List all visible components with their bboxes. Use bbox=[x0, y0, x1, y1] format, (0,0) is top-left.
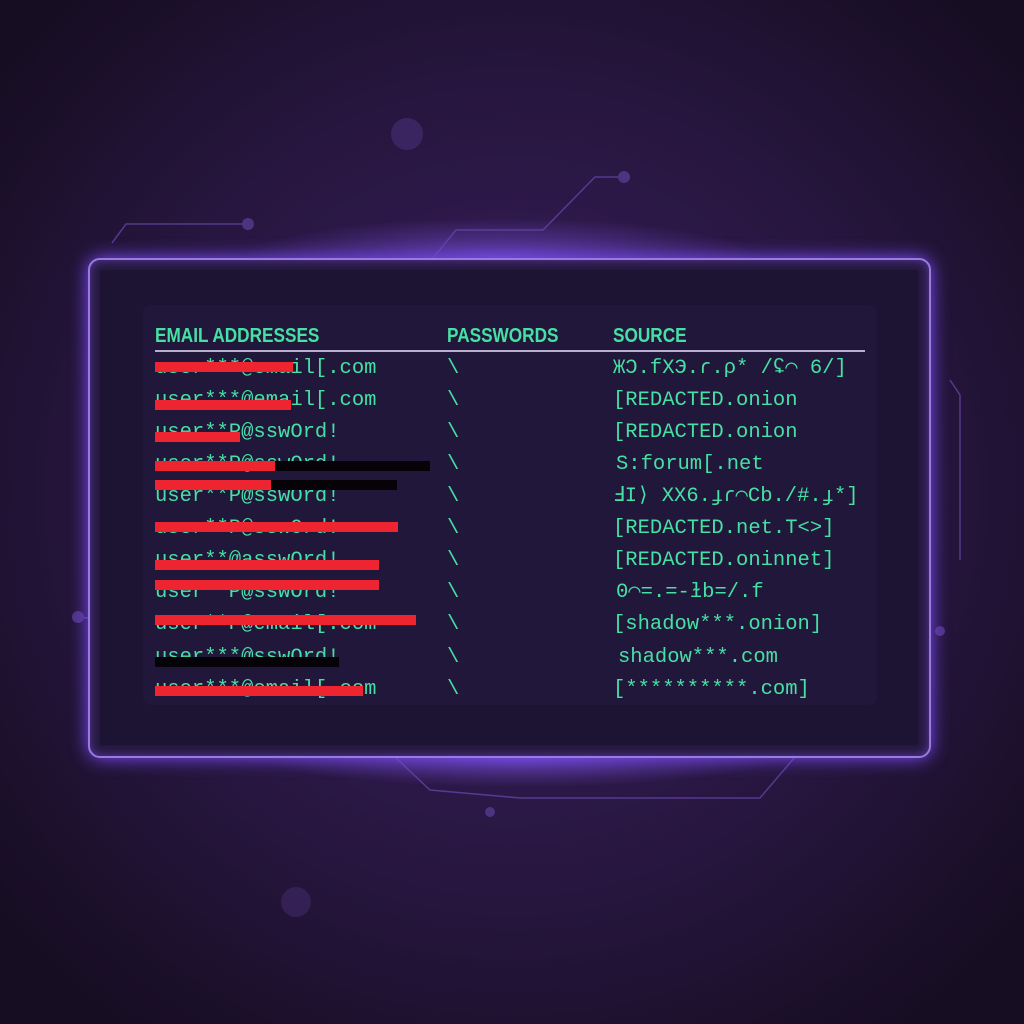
table rows: \ bbox=[447, 678, 459, 701]
table rows: user***@email[.com bbox=[155, 678, 376, 701]
table rows: ℲI⟩ XX6.ɟɾ⌒Cb./#.ɟ*] bbox=[613, 485, 859, 508]
header: passwords: PASSWORDS bbox=[447, 325, 558, 347]
table rows: [REDACTED.onion bbox=[613, 389, 798, 412]
table rows: \ bbox=[447, 613, 459, 636]
table rows: user***@email[.com bbox=[155, 389, 376, 412]
table rows: user**P@sswOrd! bbox=[155, 581, 340, 604]
panel: data table card bbox=[143, 305, 877, 705]
panel: screen bbox=[100, 270, 918, 745]
table rows: shadow***.com bbox=[618, 646, 778, 669]
table rows: ЖϽ.fXЭ.ɾ.ρ* /ʢ⌒ 6/] bbox=[613, 357, 847, 380]
header: email: EMAIL ADDRESSES bbox=[155, 325, 319, 347]
table rows: 0⌒=.=-ɫb=/.f bbox=[616, 581, 764, 604]
panel: monitor frame bbox=[88, 258, 931, 758]
table rows: \ bbox=[447, 421, 459, 444]
table rows: [REDACTED.onion bbox=[613, 421, 798, 444]
table rows: user**P@email[.com bbox=[155, 613, 376, 636]
table rows: user**P@sswOrd! bbox=[155, 421, 340, 444]
table rows: [REDACTED.oninnet] bbox=[613, 549, 834, 572]
table rows: \ bbox=[447, 389, 459, 412]
table rows: \ bbox=[447, 646, 459, 669]
table rows: \ bbox=[447, 581, 459, 604]
table rows: [REDACTED.net.T<>] bbox=[613, 517, 834, 540]
table rows bbox=[155, 357, 859, 701]
table rows: [shadow***.onion] bbox=[613, 613, 822, 636]
table rows: \ bbox=[447, 453, 459, 476]
table rows: user***@email[.com bbox=[155, 357, 376, 380]
redaction bars bbox=[155, 362, 430, 696]
table rows: \ bbox=[447, 485, 459, 508]
table rows: [**********.com] bbox=[613, 678, 810, 701]
table rows: user**P@sswOrd! bbox=[155, 517, 340, 540]
table rows: user**P@sswOrd! bbox=[155, 485, 340, 508]
table rows: S:forum[.net bbox=[616, 453, 764, 476]
table rows: user**@asswOrd! bbox=[155, 549, 340, 572]
table rows: user**P@sswOrd! bbox=[155, 453, 340, 476]
header: source: SOURCE bbox=[613, 325, 687, 347]
table rows: \ bbox=[447, 549, 459, 572]
table rows: user***@sswOrd! bbox=[155, 646, 340, 669]
table rows: \ bbox=[447, 517, 459, 540]
table rows: \ bbox=[447, 357, 459, 380]
heading: table headers bbox=[155, 322, 865, 352]
